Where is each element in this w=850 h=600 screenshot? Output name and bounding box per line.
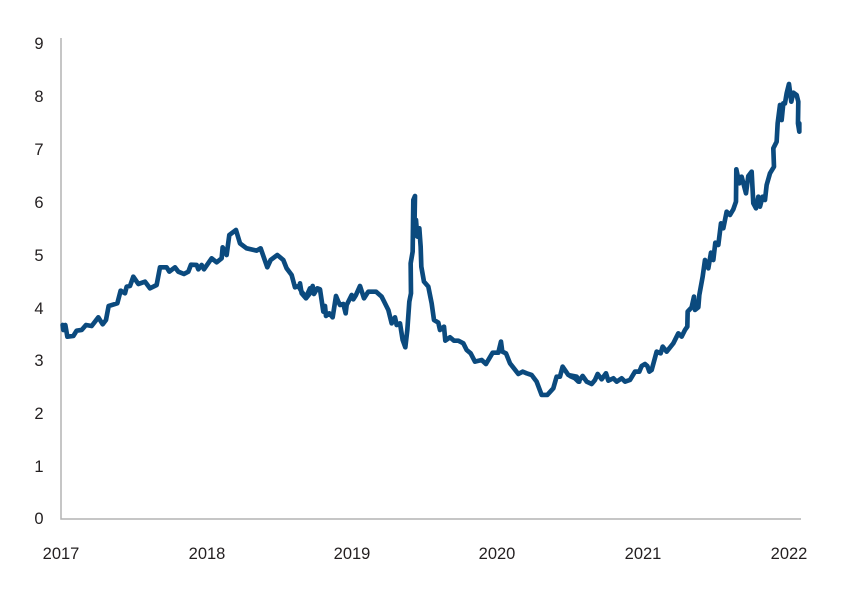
x-axis labels bbox=[43, 545, 807, 563]
y-axis labels: 4 bbox=[34, 300, 44, 318]
y-axis labels: 3 bbox=[34, 352, 44, 370]
y-axis labels: 9 bbox=[34, 35, 44, 53]
y-axis labels: 1 bbox=[34, 458, 44, 476]
data line bbox=[63, 84, 799, 395]
y-axis labels: 7 bbox=[34, 141, 44, 159]
chart axes bbox=[61, 38, 801, 519]
x-axis labels: 2017 bbox=[43, 545, 79, 563]
x-axis labels: 2020 bbox=[479, 545, 515, 563]
y-axis labels: 2 bbox=[34, 405, 44, 423]
x-axis labels: 2022 bbox=[771, 545, 807, 563]
y-axis labels bbox=[34, 35, 44, 528]
y-axis labels: 8 bbox=[34, 88, 44, 106]
y-axis labels: 6 bbox=[34, 194, 44, 212]
y-axis labels: 0 bbox=[34, 510, 44, 528]
x-axis labels: 2018 bbox=[189, 545, 225, 563]
x-axis labels: 2019 bbox=[334, 545, 370, 563]
y-axis labels: 5 bbox=[34, 247, 44, 265]
x-axis labels: 2021 bbox=[625, 545, 661, 563]
